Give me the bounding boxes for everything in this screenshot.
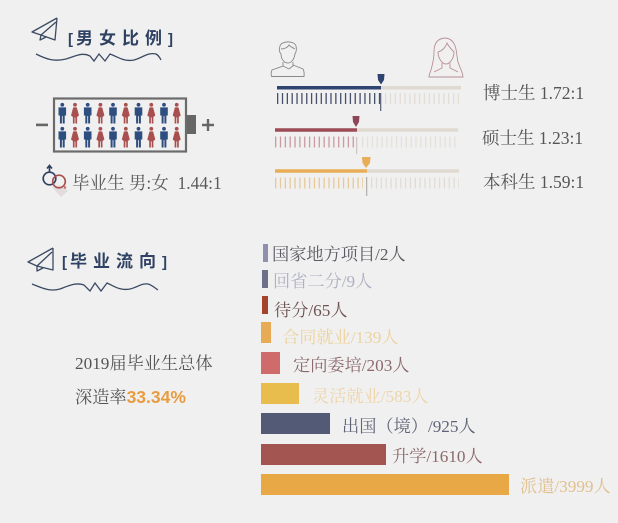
bar: contract employment bbox=[261, 322, 271, 343]
slider: master ratio bbox=[275, 116, 458, 154]
label: targeted training: 定向委培/203人 bbox=[293, 356, 410, 375]
bar: targeted training bbox=[261, 352, 280, 374]
heading: gender ratio: [男女比例] bbox=[68, 29, 176, 48]
icon: male head bbox=[271, 42, 304, 76]
slider: bachelor ratio bbox=[275, 157, 459, 196]
text: further study rate bbox=[75, 354, 213, 407]
bar: return to province bbox=[262, 270, 268, 288]
bar: flexible employment bbox=[261, 383, 299, 404]
label: return to province: 回省二分/9人 bbox=[273, 272, 372, 291]
label: contract employment: 合同就业/139人 bbox=[282, 328, 398, 347]
label: national and local projects: 国家地方项目/2人 bbox=[272, 245, 406, 264]
text: bachelor ratio: 本科生 1.59:1 bbox=[483, 172, 584, 192]
bar: national and local projects bbox=[263, 244, 268, 262]
text: further study rate: 深造率33.34% bbox=[75, 387, 186, 407]
label: dispatched employment: 派遣/3999人 bbox=[520, 477, 611, 496]
squiggle under destination heading bbox=[32, 283, 158, 291]
text: overall gender ratio: 毕业生 男:女 1.44:1 bbox=[72, 173, 222, 193]
heading: graduate destinations: [毕业流向] bbox=[62, 252, 170, 271]
icon: paper plane, gender section bbox=[32, 18, 57, 40]
text: master ratio: 硕士生 1.23:1 bbox=[482, 128, 583, 148]
icon: paper plane, destination section bbox=[28, 248, 53, 271]
text: further study rate: 2019届毕业生总体 bbox=[75, 354, 213, 373]
bar: dispatched employment bbox=[261, 474, 509, 495]
icon: gender symbols bbox=[43, 166, 68, 197]
text: doctoral ratio: 博士生 1.72:1 bbox=[483, 83, 584, 103]
label: going abroad: 出国（境）/925人 bbox=[342, 417, 476, 436]
slider: doctoral ratio bbox=[277, 74, 461, 111]
icon: battery with people bbox=[36, 98, 214, 152]
bar: pending bbox=[262, 296, 268, 314]
bar: further study bbox=[261, 444, 386, 465]
icon: female head bbox=[429, 38, 463, 77]
label: further study: 升学/1610人 bbox=[392, 447, 483, 466]
bar: going abroad bbox=[261, 413, 330, 434]
label: flexible employment: 灵活就业/583人 bbox=[312, 387, 428, 406]
squiggle under gender heading bbox=[36, 54, 161, 61]
label: pending: 待分/65人 bbox=[274, 301, 348, 320]
